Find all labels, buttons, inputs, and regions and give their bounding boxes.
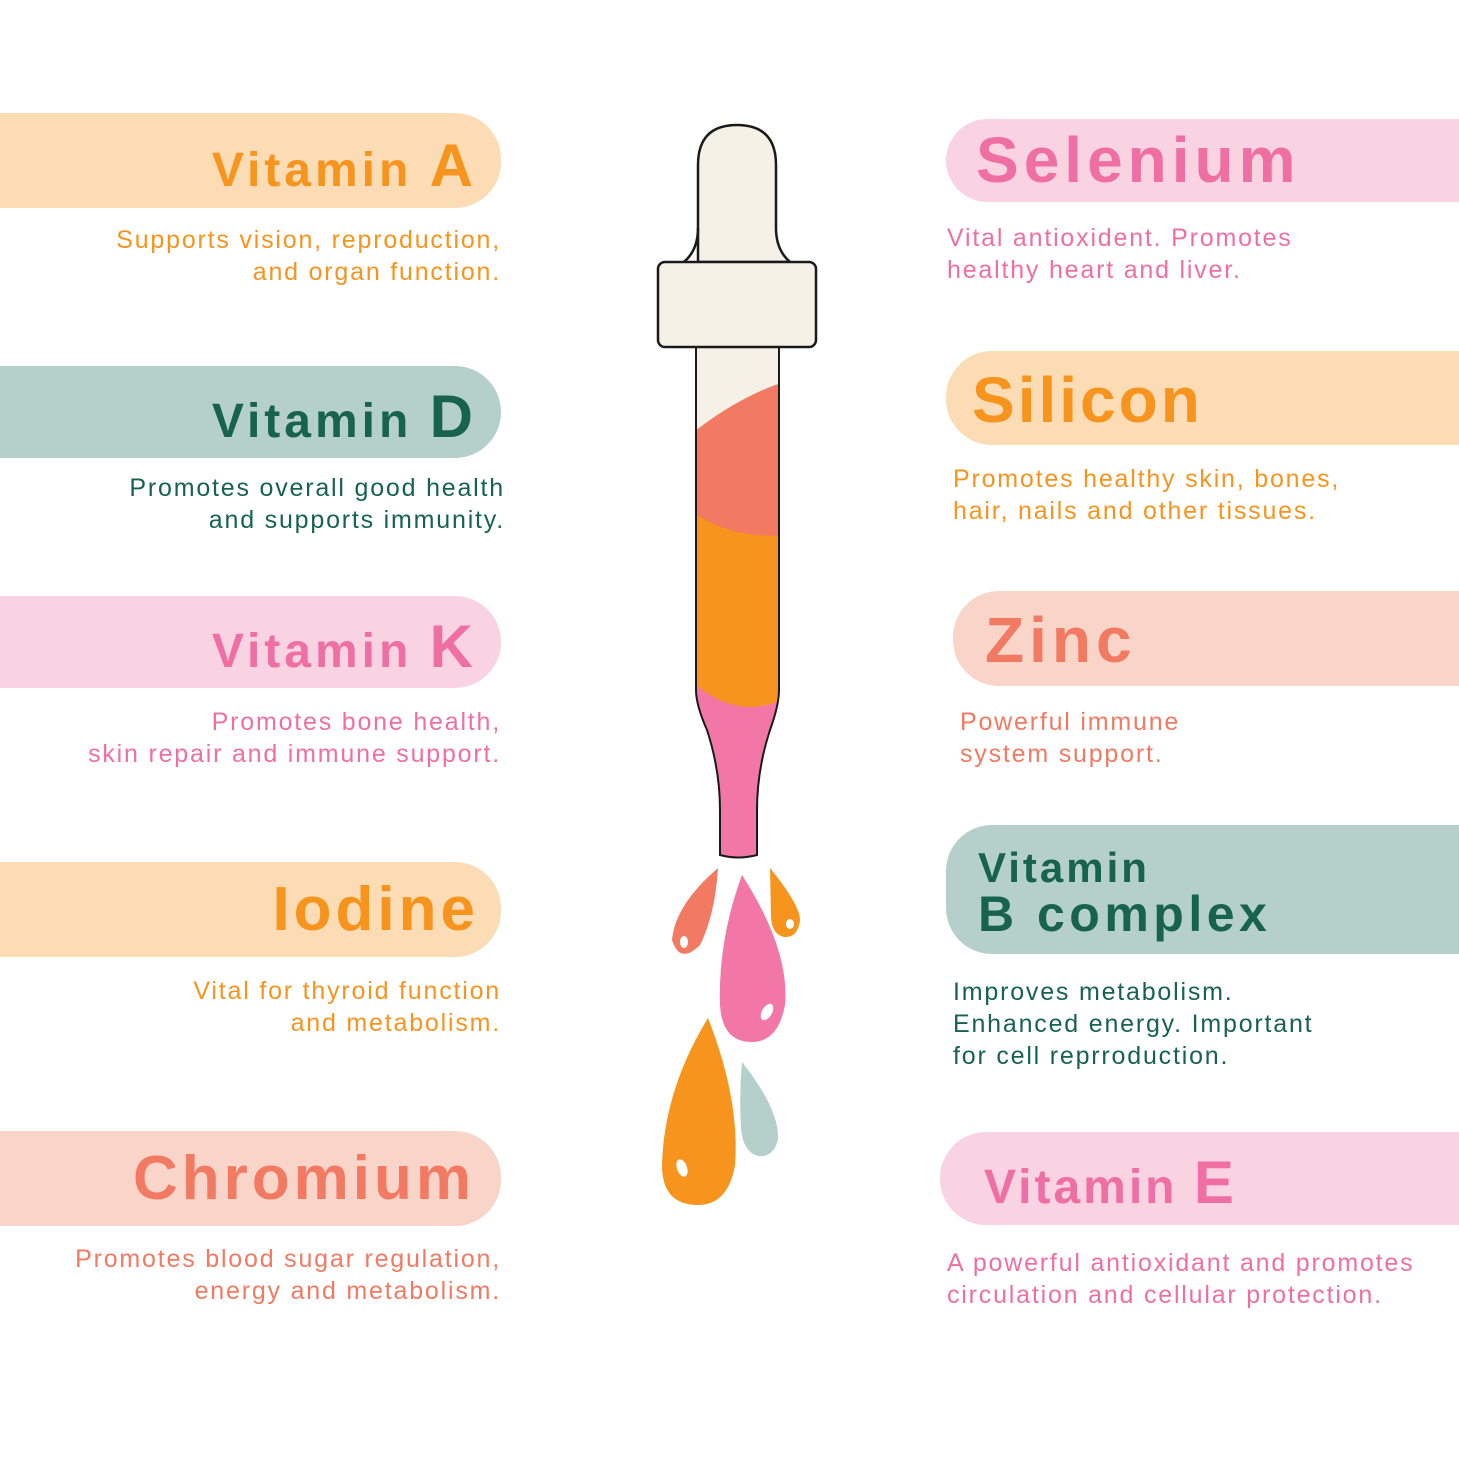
text: vitamin E: circulation and cellular protection. (947, 1281, 1383, 1309)
text: silicon: Promotes healthy skin, bones, (953, 465, 1340, 493)
text: vitamin K: skin repair and immune support. (88, 740, 501, 768)
panel: chromium (0, 1131, 501, 1226)
panel: zinc (953, 591, 1459, 686)
text: chromium (75, 1245, 501, 1305)
title: silicon: Silicon (972, 364, 1203, 436)
text: vitamin E (947, 1249, 1414, 1309)
text: zinc: system support. (960, 740, 1163, 768)
panel: silicon (946, 351, 1459, 445)
icon: drops (662, 868, 800, 1205)
title: vitamin D: Vitamin D (212, 383, 473, 450)
title: vitamin E: Vitamin E (984, 1149, 1234, 1216)
title: vitamin A: Vitamin A (212, 132, 473, 199)
text: silicon (953, 465, 1340, 525)
panel: vitamin K (0, 596, 501, 688)
text: vitamin B complex: Improves metabolism. (953, 978, 1234, 1006)
panel: iodine (0, 862, 501, 957)
text: selenium (947, 224, 1293, 284)
text: vitamin B complex (953, 978, 1313, 1070)
text: vitamin A: Supports vision, reproduction, (116, 226, 501, 254)
illustration: dropper with drops (656, 124, 818, 1205)
text: selenium: Vital antioxident. Promotes (947, 224, 1293, 252)
text: zinc (960, 708, 1180, 768)
title: vitamin B complex (978, 844, 1271, 942)
text: vitamin B complex: for cell reprroduction. (953, 1042, 1229, 1070)
title: zinc: Zinc (985, 604, 1137, 676)
text: vitamin D: and supports immunity. (209, 506, 505, 534)
icon: dropper (658, 125, 816, 880)
text: vitamin A (116, 226, 501, 286)
text: vitamin K (88, 708, 501, 768)
text: iodine: Vital for thyroid function (193, 977, 501, 1005)
title: vitamin K: Vitamin K (212, 613, 473, 680)
text: selenium: healthy heart and liver. (947, 256, 1242, 284)
title: vitamin B complex: Vitamin (978, 844, 1150, 891)
text: iodine (193, 977, 501, 1037)
text: vitamin K: Promotes bone health, (212, 708, 501, 736)
text: vitamin E: A powerful antioxidant and promotes (947, 1249, 1414, 1277)
title: iodine: Iodine (272, 875, 479, 944)
panel: vitamin A (0, 113, 501, 208)
text: zinc: Powerful immune (960, 708, 1180, 736)
panel: vitamin E (940, 1132, 1459, 1225)
text: vitamin B complex: Enhanced energy. Important (953, 1010, 1313, 1038)
text: vitamin D (129, 474, 505, 534)
panel: vitamin B complex (946, 825, 1459, 954)
title: vitamin B complex: B complex (978, 886, 1271, 942)
panel: vitamin D (0, 366, 501, 458)
text: vitamin A: and organ function. (253, 258, 501, 286)
text: vitamin D: Promotes overall good health (129, 474, 505, 502)
title: chromium: Chromium (133, 1144, 475, 1213)
text: chromium: energy and metabolism. (195, 1277, 501, 1305)
text: chromium: Promotes blood sugar regulation, (75, 1245, 501, 1273)
text: silicon: hair, nails and other tissues. (953, 497, 1317, 525)
title: selenium: Selenium (976, 124, 1301, 196)
text: iodine: and metabolism. (291, 1009, 501, 1037)
panel: selenium (946, 119, 1459, 202)
